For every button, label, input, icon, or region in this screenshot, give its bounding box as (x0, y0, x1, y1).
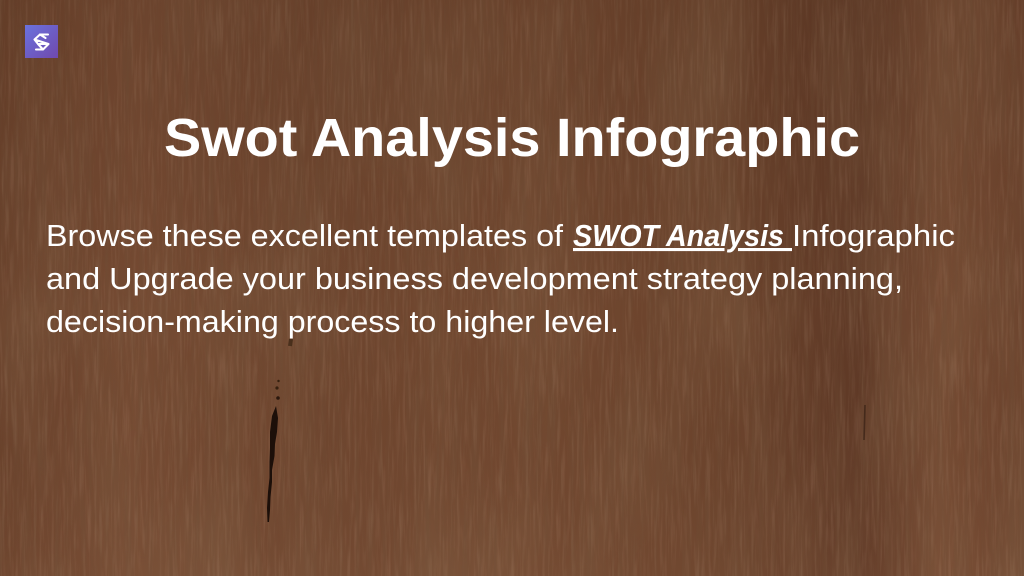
body text (46, 218, 955, 339)
body line 3: decision-making process to higher level. (46, 304, 619, 339)
wood crack (267, 339, 865, 522)
title: Swot Analysis Infographic (164, 108, 860, 168)
body line 1: Browse these excellent templates of (46, 218, 572, 253)
body line 2: and Upgrade your business development strategy planning, (46, 261, 903, 296)
logo badge (25, 25, 58, 58)
body line 1: SWOT Analysis (573, 218, 792, 253)
body line 1: Infographic (792, 218, 955, 253)
icon: logo mark (34, 34, 48, 50)
